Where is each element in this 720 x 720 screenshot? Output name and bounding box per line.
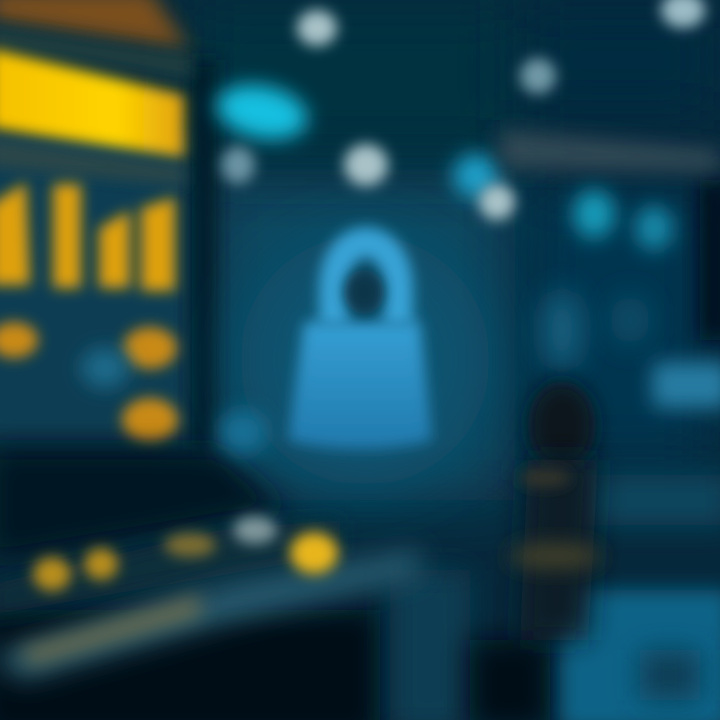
lock body — [288, 322, 432, 449]
icon: glowing padlock — [219, 235, 490, 485]
desk with keyboard — [0, 450, 420, 680]
yellow banner — [0, 48, 184, 158]
floating data glyphs — [212, 0, 705, 220]
silhouette: person — [509, 381, 601, 640]
lock shackle — [334, 242, 398, 325]
panel: right side equipment — [500, 130, 720, 408]
monitor top bar — [0, 0, 190, 50]
panel: monitor with charts — [0, 0, 216, 450]
yellow buttons — [0, 322, 178, 442]
keyboard keys — [33, 516, 338, 591]
bar chart — [0, 182, 175, 291]
